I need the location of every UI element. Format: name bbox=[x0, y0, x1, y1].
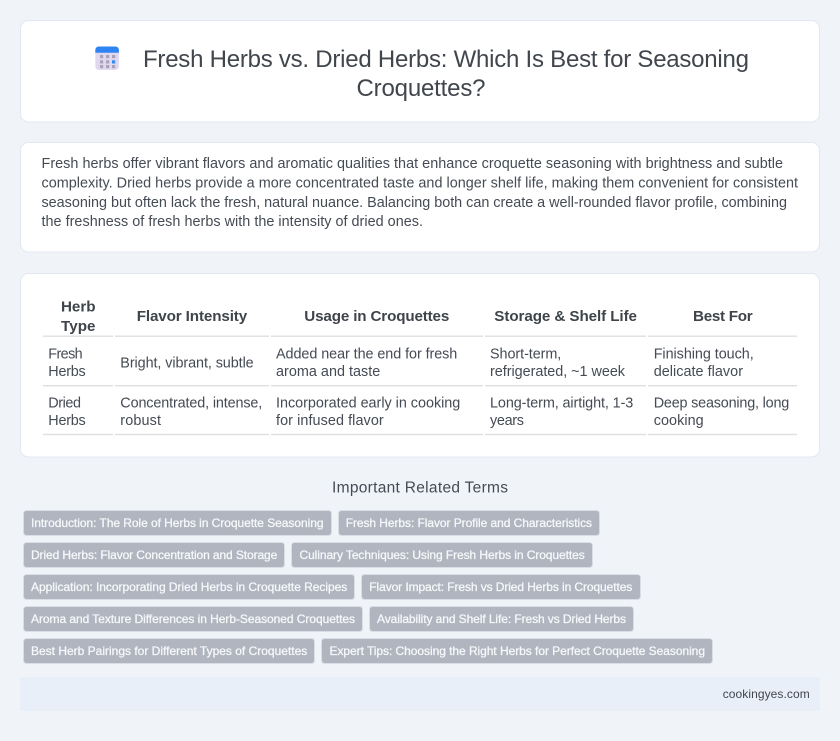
title bbox=[143, 46, 749, 102]
panel: introduction text bbox=[20, 142, 820, 252]
related terms tags: Availability and Shelf Life: Fresh vs Dried Herbs bbox=[377, 612, 626, 626]
table header: Usage in Croquettes bbox=[304, 308, 449, 325]
related terms tags: Expert Tips: Choosing the Right Herbs for Perfect Croquette Seasoning bbox=[330, 644, 705, 658]
panel: introduction text: the freshness of fresh herbs with the intensity of dried ones. bbox=[42, 214, 423, 230]
table row: dried herbs: robust bbox=[120, 413, 161, 429]
table row: fresh herbs: Fresh bbox=[48, 346, 83, 362]
table row: fresh herbs: refrigerated, ~1 week bbox=[490, 364, 626, 380]
table row: dried herbs: Incorporated early in cooking bbox=[276, 395, 460, 411]
footer: cookingyes.com bbox=[723, 687, 810, 701]
panel: comparison table bbox=[20, 274, 820, 457]
footer bbox=[20, 677, 820, 711]
table row: dried herbs bbox=[48, 395, 789, 429]
table row: fresh herbs: Finishing touch, bbox=[654, 346, 754, 362]
related terms tags: Introduction: The Role of Herbs in Croquette Seasoning bbox=[31, 516, 324, 530]
panel: title card bbox=[20, 20, 820, 122]
table row: dried herbs: Long-term, airtight, 1-3 bbox=[490, 395, 633, 411]
table row: fresh herbs: aroma and taste bbox=[276, 364, 380, 380]
table row: dried herbs: Herbs bbox=[48, 413, 86, 429]
related terms tags: Dried Herbs: Flavor Concentration and Storage bbox=[31, 548, 278, 562]
related terms tags bbox=[24, 510, 712, 664]
title: Fresh Herbs vs. Dried Herbs: Which Is Best for Seasoning bbox=[143, 46, 749, 73]
related terms tags: Culinary Techniques: Using Fresh Herbs in Croquettes bbox=[300, 548, 585, 562]
table header: Type bbox=[61, 318, 96, 335]
table row: fresh herbs: Short-term, bbox=[490, 346, 561, 362]
table row: fresh herbs: Bright, vibrant, subtle bbox=[120, 355, 254, 371]
icon: calendar bbox=[95, 46, 119, 70]
related terms tags: Application: Incorporating Dried Herbs in Croquette Recipes bbox=[31, 580, 347, 594]
table header: Flavor Intensity bbox=[137, 308, 248, 325]
related terms tags: Flavor Impact: Fresh vs Dried Herbs in Croquettes bbox=[369, 580, 632, 594]
heading: related terms: Important Related Terms bbox=[332, 480, 508, 496]
panel: introduction text: Fresh herbs offer vibrant flavors and aromatic qualities that enhance croquette seasoning with brightness and subtle bbox=[42, 156, 783, 172]
table header bbox=[61, 299, 753, 335]
related terms tags: Fresh Herbs: Flavor Profile and Characteristics bbox=[346, 516, 592, 530]
table header: Herb bbox=[61, 299, 96, 316]
table row: fresh herbs: Added near the end for fresh bbox=[276, 346, 457, 362]
related terms tags: Aroma and Texture Differences in Herb-Seasoned Croquettes bbox=[31, 612, 355, 626]
panel: introduction text: seasoning but often lack the fresh, natural nuance. Balancing both can create a well-rounded flavor profile, combining bbox=[42, 195, 787, 211]
panel: introduction text: complexity. Dried herbs provide a more concentrated taste and longer shelf life, making them convenient for consistent bbox=[42, 176, 798, 192]
table row: dried herbs: for infused flavor bbox=[276, 413, 384, 429]
table row: dried herbs: Deep seasoning, long bbox=[654, 395, 789, 411]
table header: Best For bbox=[693, 308, 753, 325]
table header: Storage & Shelf Life bbox=[494, 308, 637, 325]
table row: dried herbs: Dried bbox=[48, 395, 81, 411]
related terms tags: Best Herb Pairings for Different Types of Croquettes bbox=[31, 644, 307, 658]
table row: dried herbs: Concentrated, intense, bbox=[120, 395, 262, 411]
table row: dried herbs: years bbox=[490, 413, 524, 429]
table row: fresh herbs: delicate flavor bbox=[654, 364, 743, 380]
table row: fresh herbs: Herbs bbox=[48, 364, 86, 380]
title: Croquettes? bbox=[356, 75, 486, 102]
table row: dried herbs: cooking bbox=[654, 413, 704, 429]
table row: fresh herbs bbox=[48, 346, 754, 380]
